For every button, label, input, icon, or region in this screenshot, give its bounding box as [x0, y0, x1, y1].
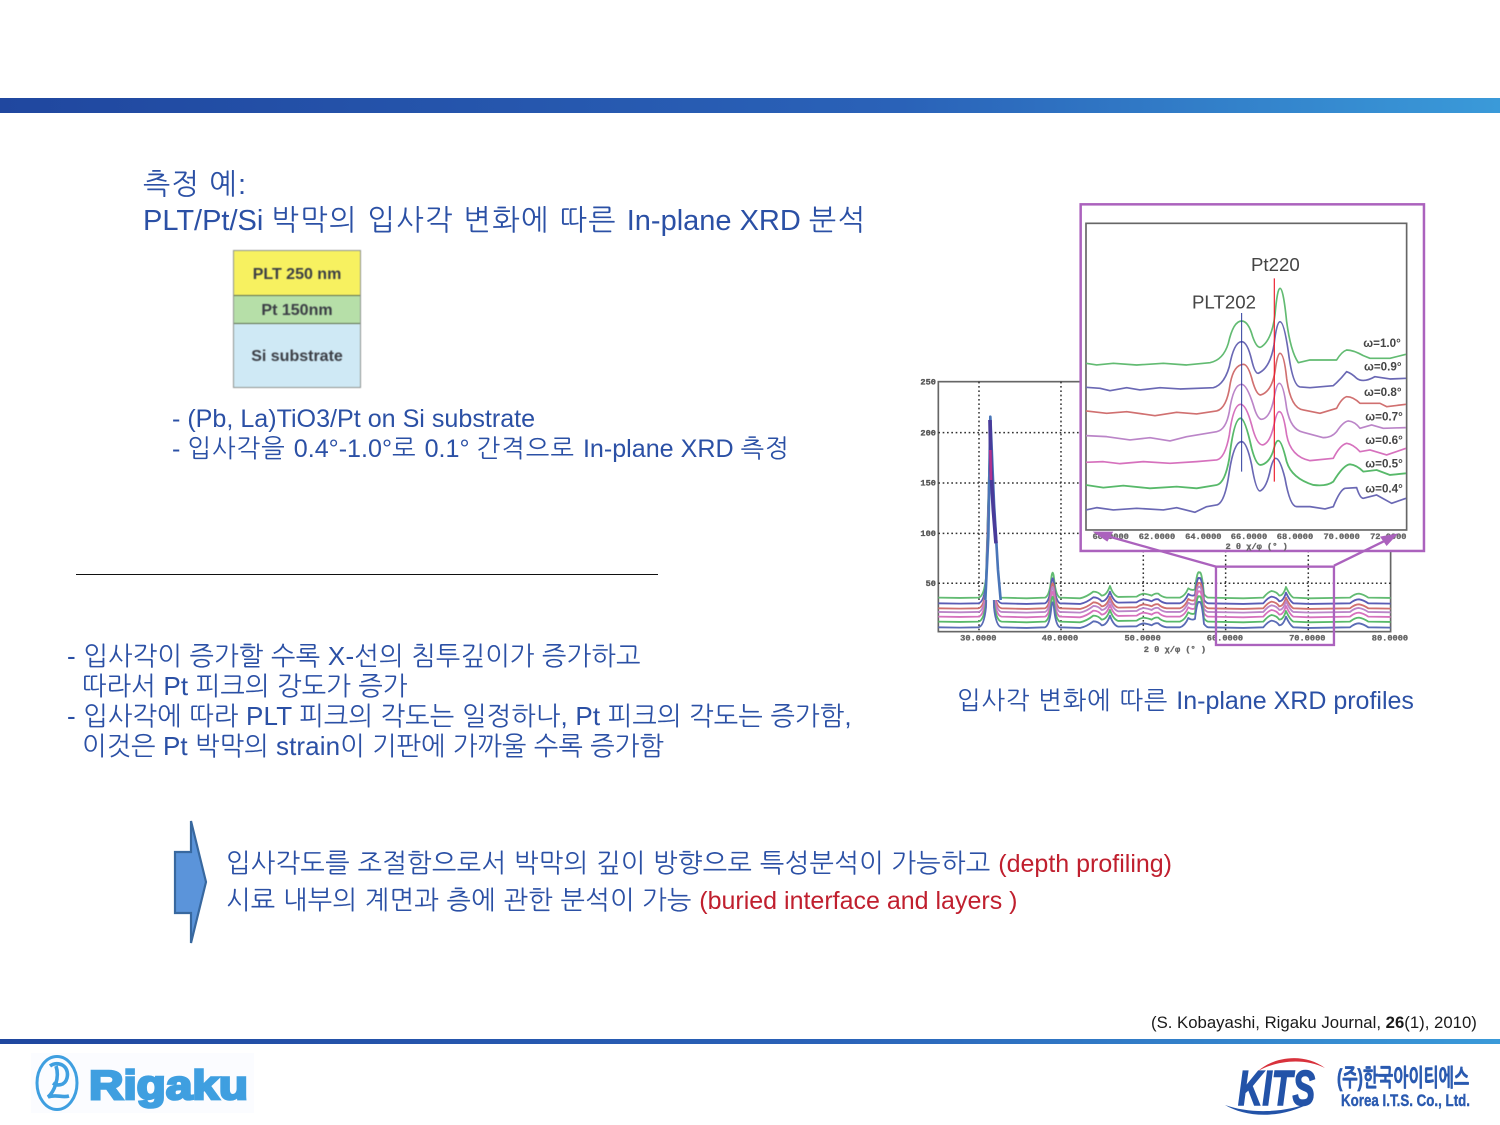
heading — [143, 169, 867, 237]
marker: Pt220 — [1273, 278, 1276, 482]
divider line — [76, 574, 658, 575]
marker: PLT202 — [1240, 313, 1243, 472]
inset x-axis labels — [1092, 532, 1406, 552]
traces for all incidence angles — [938, 417, 1391, 628]
conclusion text: 입사각도를 조절함으로서 박막의 깊이 방향으로 특성분석이 가능하고 (depth profiling) — [226, 848, 1172, 878]
y-axis labels: 250 — [920, 378, 936, 388]
findings text: 따라서 Pt 피크의 강도가 증가 — [82, 671, 408, 701]
logo: KITS — [1225, 1058, 1470, 1116]
peak labels: Pt220 — [1251, 254, 1300, 275]
layer: Si — [234, 324, 360, 387]
omega labels: ω=0.9° — [1364, 361, 1402, 374]
inset x-axis labels: 72.0000 — [1370, 532, 1406, 542]
heading: PLT/Pt/Si 박막의 입사각 변화에 따른 In-plane XRD 분석 — [143, 205, 867, 237]
zoom region box and arrows — [1093, 532, 1398, 645]
inset x-axis labels: 70.0000 — [1323, 532, 1360, 542]
trace: omega 0.5 — [1086, 418, 1406, 488]
Rigaku wordmark: Rigaku — [89, 1062, 248, 1108]
layer: PLT — [234, 251, 360, 296]
x-axis labels: 70.0000 — [1289, 634, 1325, 644]
x-axis labels: 60.0000 — [1207, 634, 1243, 644]
trace: omega 0.9 — [1086, 322, 1406, 391]
findings text — [67, 641, 852, 761]
layer: Pt — [234, 296, 360, 324]
peak labels — [1192, 254, 1300, 313]
peak labels: PLT202 — [1192, 292, 1256, 313]
findings text: 이것은 Pt 박막의 strain이 기판에 가까울 수록 증가함 — [82, 731, 664, 761]
omega labels: ω=0.5° — [1365, 458, 1403, 471]
y-axis labels: 200 — [920, 429, 936, 439]
x-axis labels: 80.0000 — [1372, 634, 1408, 644]
inset x-axis labels: 2 θ χ/φ (° ) — [1225, 542, 1288, 552]
trace: omega 0.4 — [1086, 442, 1406, 512]
x-axis labels: 40.0000 — [1042, 634, 1078, 644]
inset outer frame — [1081, 204, 1424, 551]
inset plot frame — [1086, 223, 1407, 530]
omega labels — [1363, 337, 1403, 496]
y-axis labels — [920, 378, 936, 589]
peak marker lines — [1242, 278, 1274, 482]
inset x-axis labels: 66.0000 — [1231, 532, 1267, 542]
top gradient bar — [0, 98, 1500, 113]
inset x-axis labels: 64.0000 — [1185, 532, 1222, 542]
arrow: conclusion — [175, 821, 206, 943]
bottom gradient bar — [0, 1039, 1500, 1044]
x-axis labels: 50.0000 — [1124, 634, 1161, 644]
omega labels: ω=0.7° — [1365, 411, 1403, 424]
trace: omega 0.8 — [1086, 353, 1406, 416]
conclusion text — [226, 848, 1172, 915]
plot frame — [938, 382, 1391, 632]
inset x-axis labels: 60.0000 — [1092, 532, 1129, 542]
full-range XRD chart — [920, 378, 1408, 655]
inset x-axis labels: 62.0000 — [1139, 532, 1175, 542]
x-axis labels: 2 θ χ/φ (° ) — [1144, 645, 1206, 655]
gridlines — [938, 382, 1391, 632]
inset frame and zoom chart — [1081, 204, 1424, 552]
trace: omega 0.6 — [1086, 404, 1406, 464]
logo: Rigaku — [31, 1053, 254, 1113]
omega labels: ω=0.8° — [1364, 386, 1402, 399]
citation: (S. Kobayashi, Rigaku Journal, 26(1), 2010) — [1151, 1013, 1477, 1032]
sample description: - (Pb, La)TiO3/Pt on Si substrate — [172, 405, 535, 433]
y-axis labels: 50 — [926, 579, 936, 589]
sample description: - 입사각을 0.4°-1.0°로 0.1° 간격으로 In-plane XRD 측정 — [172, 434, 790, 462]
conclusion text: 시료 내부의 계면과 층에 관한 분석이 가능 (buried interface and layers ) — [226, 885, 1017, 915]
layer: Pt: Pt 150nm — [261, 302, 333, 319]
omega labels: ω=1.0° — [1363, 337, 1401, 350]
x-axis labels: 30.0000 — [960, 634, 997, 644]
sample description — [172, 405, 790, 462]
y-axis labels: 100 — [920, 529, 936, 539]
KITS wordmark: KITS — [1238, 1062, 1315, 1116]
omega labels: ω=0.6° — [1365, 434, 1403, 447]
layer: PLT: PLT 250 nm — [253, 266, 341, 283]
blue swoosh — [1225, 1102, 1312, 1115]
trace: omega 1.0 — [1086, 288, 1406, 365]
findings text: - 입사각이 증가할 수록 X-선의 침투깊이가 증가하고 — [67, 641, 641, 671]
x-axis labels — [960, 634, 1408, 655]
findings text: - 입사각에 따라 PLT 피크의 각도는 일정하나, Pt 피크의 각도는 증가함, — [67, 701, 852, 731]
Rigaku emblem — [37, 1056, 77, 1110]
heading: 측정 예: — [143, 169, 247, 201]
red swoosh — [1258, 1058, 1325, 1071]
caption: 입사각 변화에 따른 In-plane XRD profiles — [957, 687, 1414, 715]
y-axis labels: 150 — [920, 479, 936, 489]
inset x-axis labels: 68.0000 — [1277, 532, 1313, 542]
layer: Si: Si substrate — [251, 348, 343, 365]
trace: omega 0.7 — [1086, 383, 1406, 441]
layer stack diagram — [233, 250, 361, 388]
omega labels: ω=0.4° — [1365, 483, 1403, 496]
